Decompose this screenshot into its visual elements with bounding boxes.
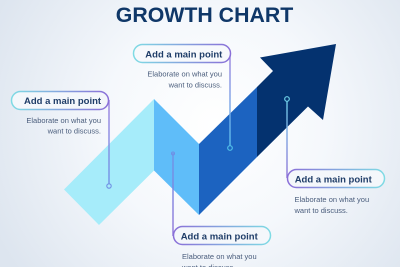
body text: Elaborate on what you xyxy=(26,116,101,125)
body text: Elaborate on what you xyxy=(294,195,369,204)
callout 4: Add a main point xyxy=(181,232,259,242)
pill heading xyxy=(12,92,108,110)
callout 3: want to discuss. xyxy=(294,206,348,215)
arrow head xyxy=(257,44,336,157)
callout 2 xyxy=(134,44,230,90)
connector line 2 xyxy=(228,54,232,150)
connector line 4 xyxy=(172,152,174,236)
callout 3 xyxy=(288,170,384,215)
arrow segment 2 xyxy=(154,99,199,215)
body text: Elaborate on what you xyxy=(182,252,257,261)
body text: Elaborate on what you xyxy=(147,70,222,78)
pill heading xyxy=(174,226,270,244)
callout 2: want to discuss. xyxy=(168,80,222,90)
callout 4 xyxy=(174,226,270,267)
callout 3: Add a main point xyxy=(295,174,373,186)
pill heading xyxy=(134,44,230,62)
arrow segment 3 xyxy=(199,87,257,215)
arrow segment 1 xyxy=(64,99,154,225)
pill heading xyxy=(288,170,384,188)
connector line 3 xyxy=(285,97,289,178)
connector line 1 xyxy=(107,100,111,188)
callout 2: Add a main point xyxy=(145,50,223,60)
callout 1 xyxy=(12,92,108,136)
callout 1: want to discuss. xyxy=(47,126,101,136)
callout 1: Add a main point xyxy=(24,96,102,107)
title: GROWTH CHART xyxy=(116,3,293,27)
chart: growth arrow xyxy=(64,44,336,225)
